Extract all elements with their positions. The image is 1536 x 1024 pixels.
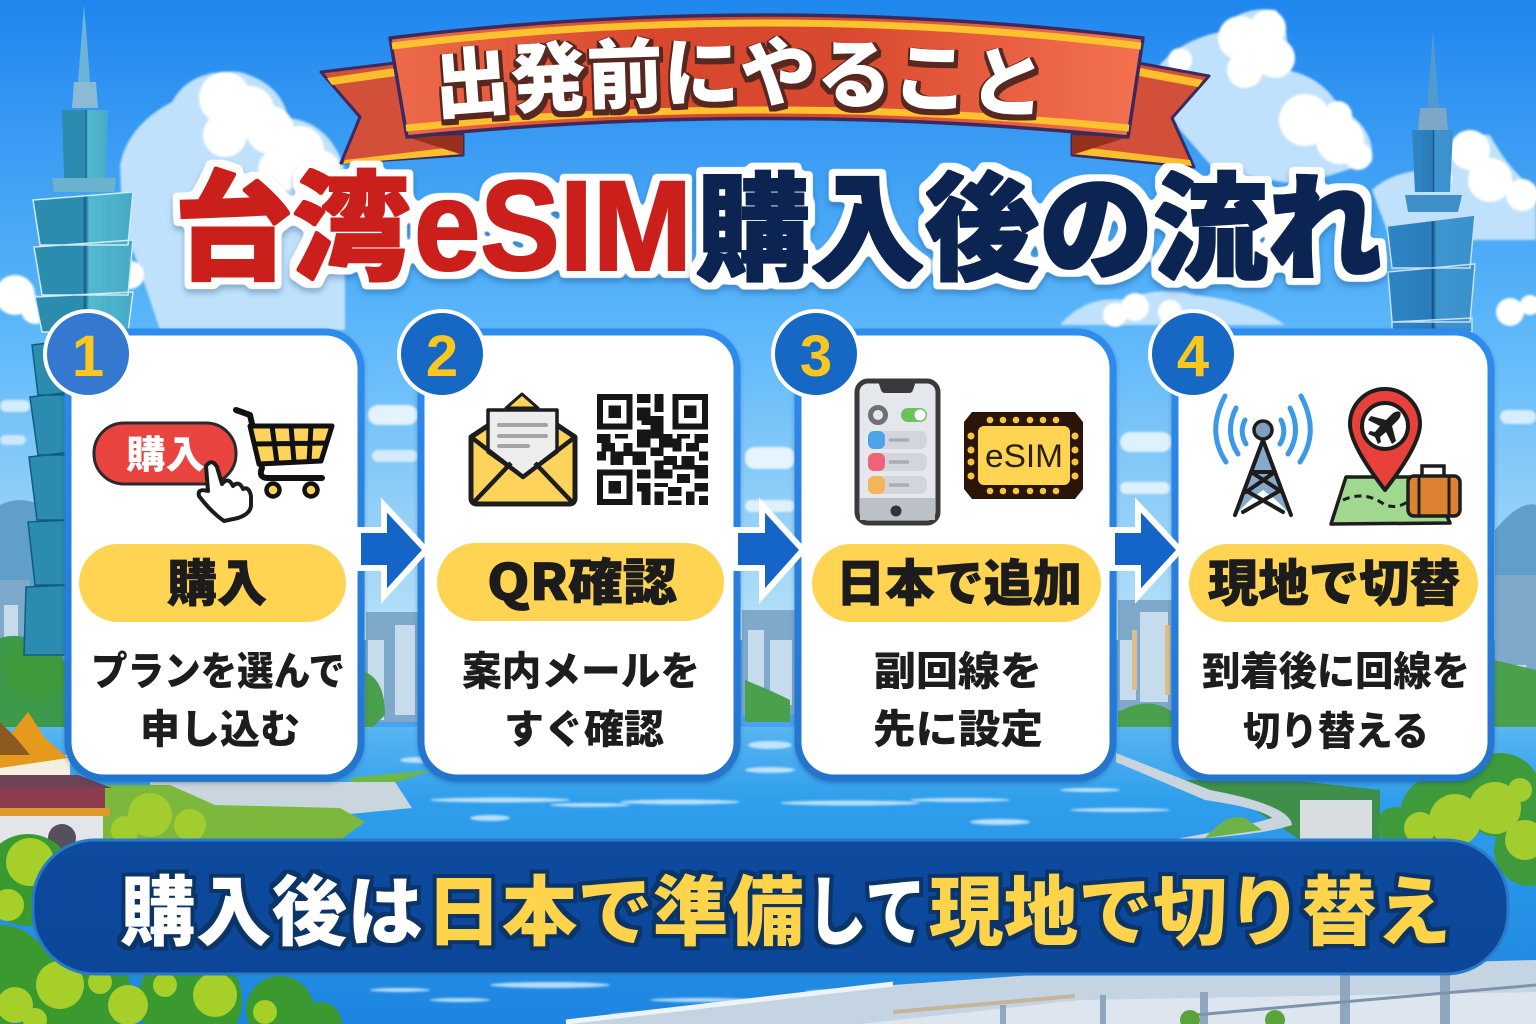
banner message: して [806,851,926,961]
step 1 label pill: 購入 [167,544,267,616]
step 2 description: すぐ確認 [504,697,664,755]
title red part: eSIM [414,155,692,298]
title navy part: 購入後の流れ [696,136,1382,304]
step 2 description [462,639,700,755]
step 3 description [873,639,1043,755]
icon: suitcase [1408,466,1460,516]
ribbon band [390,15,1143,137]
panel: step 2 QR check [421,332,737,778]
icon: eSIM chip: eSIM [985,438,1063,474]
badge 2 [399,311,485,397]
icon: buy button [94,423,236,484]
arrow 1 to 2 [358,505,426,596]
badge 4: 4 [1177,324,1209,389]
highway at lower right [564,960,1536,1024]
step 4 label pill: 現地で切替 [1208,544,1460,616]
arrow 2 to 3 [735,505,803,596]
icon: signal tower [1216,396,1310,515]
main title [174,133,1382,304]
step 4 description: 到着後に回線を [1202,639,1470,697]
right Taipei 101 tower [1387,30,1475,332]
icon: buy button: 購入 [126,424,205,479]
banner message: 日本で準備 [426,851,804,961]
banner message: 購入後は [120,851,423,961]
ribbon right tail [1072,63,1209,167]
bottom banner [33,840,1508,974]
arrow 3 to 4 [1112,505,1180,596]
ribbon gold trim [392,23,1141,128]
banner message: 現地で切り替え [929,851,1451,961]
badge 2: 2 [426,324,458,389]
panel: step 3 add in Japan [798,332,1113,778]
icon: map with location pin [1331,389,1450,524]
step 4 description: 切り替える [1243,699,1429,757]
step 3 description: 副回線を [874,639,1042,697]
step 1 label pill [79,544,346,622]
step 3 label pill: 日本で追加 [836,544,1082,616]
step 4 description [1202,639,1470,757]
step 2 label pill [437,543,724,621]
step 3 description: 先に設定 [873,697,1043,755]
title ribbon [319,13,1211,168]
badge 4 [1150,311,1236,397]
ribbon left tail [321,63,463,164]
icon: QR code [597,394,708,505]
icon: pointing hand [199,462,251,521]
badge 1 [45,311,131,397]
icon: smartphone settings [857,381,938,523]
icon: envelope with letter [471,394,575,504]
step 1 description [91,639,345,755]
step 2 description: 案内メールを [462,639,700,697]
step 1 description: プランを選んで [91,639,345,697]
title red part: 台湾 [174,133,410,304]
icon: shopping cart [236,410,332,496]
step 1 description: 申し込む [140,697,300,755]
temple at left edge [0,712,112,852]
left Taipei 101 tower [24,5,133,655]
badge 3 [773,311,859,397]
panel: step 1 purchase [68,332,361,778]
icon: eSIM chip [964,412,1083,499]
panel: step 4 switch on arrival [1175,332,1491,778]
ribbon heading text: 出発前にやること [439,36,1039,126]
step 2 label pill: QR確認 [487,543,677,615]
badge 1: 1 [72,324,104,389]
badge 3: 3 [800,324,832,389]
